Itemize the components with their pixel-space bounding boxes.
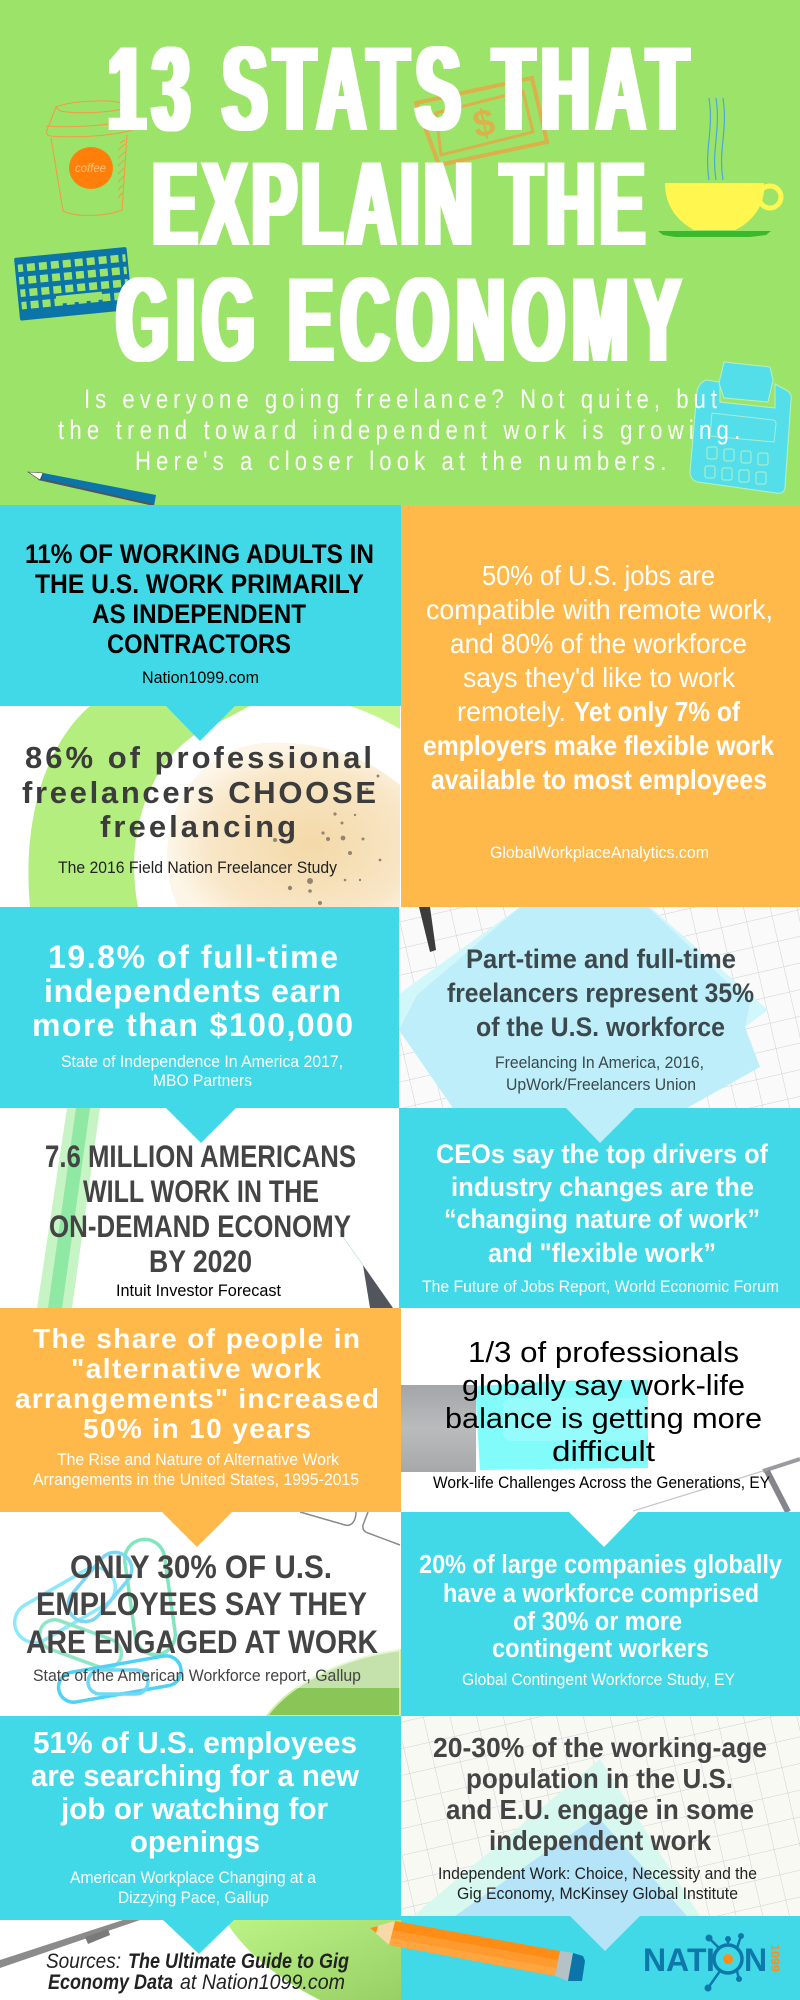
source: Dizzying Pace, Gallup [118,1889,269,1907]
sources note: Sources: [46,1950,121,1973]
stat: 86% choose freelancing: 86% of professional [25,740,372,775]
panel: CEOs top drivers [399,1108,800,1308]
stat: 1/3 of professionals: balance is getting more [445,1403,762,1435]
source: The 2016 Field Nation Freelancer Study [58,859,338,877]
stat: 7.6 million: ON-DEMAND ECONOMY [49,1208,351,1244]
icon: keyboard [14,247,133,321]
stat: remote work text: and 80% of the workforce [450,628,747,659]
stat: 7.6 million: BY 2020 [149,1243,252,1279]
source: State of Independence In America 2017, [61,1053,343,1071]
stat: 86% choose freelancing: freelancers CHOOSE [22,775,376,810]
stat: 35% of workforce [447,944,754,1042]
title: GIG ECONOMY [116,252,680,387]
icon: orange pencil [370,1921,585,1981]
stat: 35% of workforce: of the U.S. workforce [476,1012,725,1042]
stat: 1/3 of professionals [445,1337,762,1468]
panel: photo note part-time freelancers [399,907,800,1108]
panel: alternative work arrangements [0,1308,401,1547]
panel: photo paperclips 30% engaged [0,1512,400,1716]
panel: photo straw 7.6 million [0,1108,399,1308]
source [495,1054,704,1094]
source: Global Contingent Workforce Study, EY [462,1671,735,1689]
stat: alternative work [15,1323,379,1444]
icon: tea cup with steam [658,98,781,237]
stat: remote work text: available to most employees [431,764,767,795]
stat: 11%: CONTRACTORS [107,629,291,659]
stat: 1/3 of professionals: globally say work-life [462,1370,745,1402]
stat: 20-30%: independent work [489,1825,712,1856]
source: Freelancing In America, 2016, [495,1054,704,1072]
stat: 51%: 51% of U.S. employees [33,1725,357,1760]
subtitle: Here's a closer look at the numbers. [135,447,666,477]
panel: photo footer left [0,1920,401,2000]
panel: 19.8% earn more [0,907,399,1143]
subtitle: Is everyone going freelance? Not quite, but [84,385,717,415]
stat: 51%: job or watching for [60,1791,328,1826]
sources note: at Nation1099.com [180,1971,345,1994]
stat: 20-30%: population in the U.S. [466,1763,733,1794]
icon: dollar bill: $ [469,101,499,147]
source: GlobalWorkplaceAnalytics.com [490,844,709,862]
panel: contingent workers [401,1512,800,1716]
stat: 7.6 million: 7.6 MILLION AMERICANS [45,1138,356,1174]
stat: 20% large companies: have a workforce comprised [443,1580,759,1608]
stat: remote work text: compatible with remote work, [426,594,773,625]
panel: header background [0,0,800,506]
panel: 51% employees searching [0,1716,401,1954]
icon: coffee cup [46,101,133,216]
logo: Nation 1099: NATI [643,1942,715,1978]
stat: 35% of workforce: Part-time and full-time [466,944,736,974]
stat: 11%: THE U.S. WORK PRIMARILY [35,569,364,599]
stat: 51% [31,1725,360,1859]
source: Work-life Challenges Across the Generations, EY [433,1474,770,1492]
source: State of the American Workforce report, Gallup [33,1667,361,1685]
stat: alternative work: The share of people in [33,1323,360,1354]
stat: 20-30%: and E.U. engage in some [446,1794,754,1825]
stat: CEOs: and "flexible work” [488,1238,716,1268]
source: The Rise and Nature of Alternative Work [57,1451,340,1469]
stat: CEOs [436,1139,769,1268]
icon: coffee cup: coffee [75,161,106,175]
stat: 30% engaged [26,1549,378,1660]
stat: 7.6 million [45,1138,356,1279]
stat: 30% engaged: ARE ENGAGED AT WORK [26,1624,378,1660]
source: The Future of Jobs Report, World Economic Forum [422,1278,779,1296]
stat: 19.8%: 19.8% of full-time [48,939,338,975]
stat: 20% large companies: of 30% or more [513,1608,682,1636]
stat: 19.8%: independents earn [44,973,341,1009]
panel: photo coffee [0,706,400,907]
source [438,1865,757,1903]
stat: alternative work: 50% in 10 years [83,1413,311,1444]
stat: 86% choose freelancing [22,740,376,844]
stat: 30% engaged: EMPLOYEES SAY THEY [36,1586,367,1622]
source: Gig Economy, McKinsey Global Institute [457,1885,738,1903]
icon: calculator [690,362,791,493]
stat: 20% large companies: contingent workers [492,1635,709,1663]
stat: CEOs: CEOs say the top drivers of [436,1139,769,1169]
sources note [46,1950,349,1994]
icon: blue pencil [28,472,156,506]
stat: CEOs: “changing nature of work” [444,1204,760,1234]
logo: Nation 1099 [643,1933,782,1992]
title: 13 STATS THAT [108,21,688,156]
icon: dollar bill [416,78,547,165]
logo: Nation 1099: 1099 [768,1944,782,1972]
title: EXPLAIN THE [152,136,645,271]
source: MBO Partners [153,1072,252,1090]
stat: remote work text: 50% of U.S. jobs are [482,560,715,591]
panel: footer right [401,1916,800,2000]
source: Intuit Investor Forecast [116,1282,281,1300]
stat: alternative work: arrangements" increased [15,1383,379,1414]
stat: CEOs: industry changes are the [451,1172,754,1202]
source: Arrangements in the United States, 1995-2015 [33,1471,359,1489]
sources note: The Ultimate Guide to Gig [128,1950,349,1973]
stat: remote work text: says they'd like to work [463,662,735,693]
source [61,1053,343,1090]
stat: 19.8% [32,939,353,1043]
source: Independent Work: Choice, Necessity and the [438,1865,757,1883]
stat: 35% of workforce: freelancers represent 35% [447,978,754,1008]
stat: remote work text: remotely. [457,696,566,727]
stat: 11% [25,539,374,659]
stat: 19.8%: more than $100,000 [32,1007,353,1043]
stat: 20-30%: 20-30% of the working-age [433,1732,767,1763]
stat: 51%: openings [130,1824,260,1859]
stat: 20% large companies [419,1551,783,1663]
source [33,1451,359,1489]
subtitle [58,385,740,477]
sources note: Economy Data [48,1971,173,1994]
stat: 51%: are searching for a new [31,1758,360,1793]
panel: photo marker work-life balance [401,1308,800,1512]
stat: 1/3 of professionals: 1/3 of professionals [468,1337,739,1369]
stat: alternative work: "alternative work [71,1353,321,1384]
stat: 20-30% [433,1732,767,1856]
panel: photo grid 20-30% [401,1716,800,1951]
source [70,1869,317,1907]
source: American Workplace Changing at a [70,1869,317,1887]
logo: Nation 1099: N [744,1942,767,1978]
stat: 30% engaged: ONLY 30% OF U.S. [70,1549,332,1585]
source: Nation1099.com [142,669,259,687]
source: UpWork/Freelancers Union [506,1076,696,1094]
panel: 11% independent contractors [0,505,401,741]
stat: 7.6 million: WILL WORK IN THE [83,1173,319,1209]
stat: 11%: AS INDEPENDENT [92,599,306,629]
panel: 50% remote work [401,505,800,907]
stat: 86% choose freelancing: freelancing [100,809,296,844]
stat: remote work text [423,560,775,795]
stat: 1/3 of professionals: difficult [552,1436,655,1468]
stat: 11%: 11% OF WORKING ADULTS IN [25,539,374,569]
stat: remote work text: Yet only 7% of [574,696,741,727]
title [108,21,688,387]
subtitle: the trend toward independent work is growing. [58,416,740,446]
